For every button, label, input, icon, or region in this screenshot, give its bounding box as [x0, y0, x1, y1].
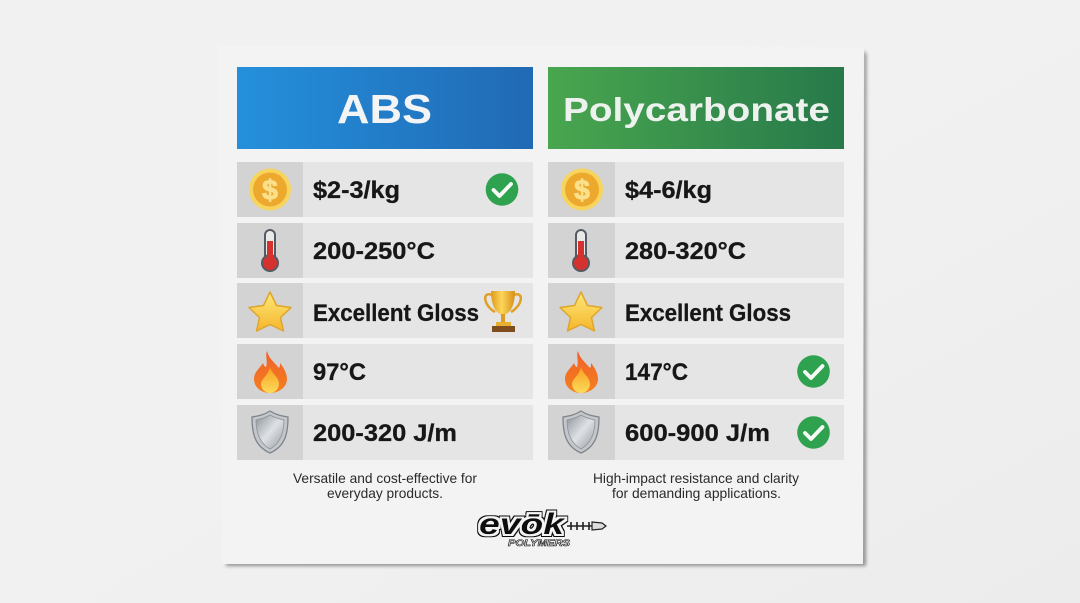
row: impact strength	[548, 405, 844, 460]
Polycarbonate header: Polycarbonate	[563, 91, 830, 128]
ABS header	[237, 67, 533, 149]
row: gloss	[548, 283, 844, 338]
row: impact strength: 200-320 J/m	[313, 420, 457, 447]
Polycarbonate caption: for demanding applications.	[612, 485, 781, 501]
ABS caption: everyday products.	[327, 485, 443, 501]
row: heat deflection	[237, 344, 533, 399]
logo: evok polymers	[479, 508, 606, 548]
row: processing temperature	[237, 223, 533, 278]
row: processing temperature: 280-320°C	[625, 238, 746, 265]
card shadow	[226, 50, 866, 566]
panel: ABS	[237, 67, 533, 501]
row: gloss: Excellent Gloss	[313, 300, 479, 327]
ABS caption: Versatile and cost-effective for	[293, 470, 477, 486]
row: cost: $2-3/kg	[313, 177, 400, 204]
row: processing temperature: 200-250°C	[313, 238, 435, 265]
Polycarbonate caption	[593, 470, 799, 501]
icon: trophy	[485, 291, 521, 332]
row: heat deflection: 97°C	[313, 359, 366, 386]
row: impact strength	[237, 405, 533, 460]
Polycarbonate header	[548, 67, 844, 149]
row: cost: $4-6/kg	[625, 177, 712, 204]
row: processing temperature	[548, 223, 844, 278]
logo: evok polymers: evōk	[479, 508, 566, 541]
card	[218, 46, 864, 564]
Polycarbonate caption: High-impact resistance and clarity	[593, 470, 799, 486]
panel: Polycarbonate	[548, 67, 844, 501]
ABS caption	[293, 470, 477, 501]
row: impact strength: 600-900 J/m	[625, 420, 770, 447]
ABS header: ABS	[337, 86, 432, 132]
row: cost	[237, 162, 533, 217]
row: heat deflection: 147°C	[625, 359, 688, 386]
row: gloss	[237, 283, 533, 338]
row: cost	[548, 162, 844, 217]
logo: evok polymers: POLYMERS	[508, 538, 570, 548]
row: heat deflection	[548, 344, 844, 399]
row: gloss: Excellent Gloss	[625, 300, 791, 327]
